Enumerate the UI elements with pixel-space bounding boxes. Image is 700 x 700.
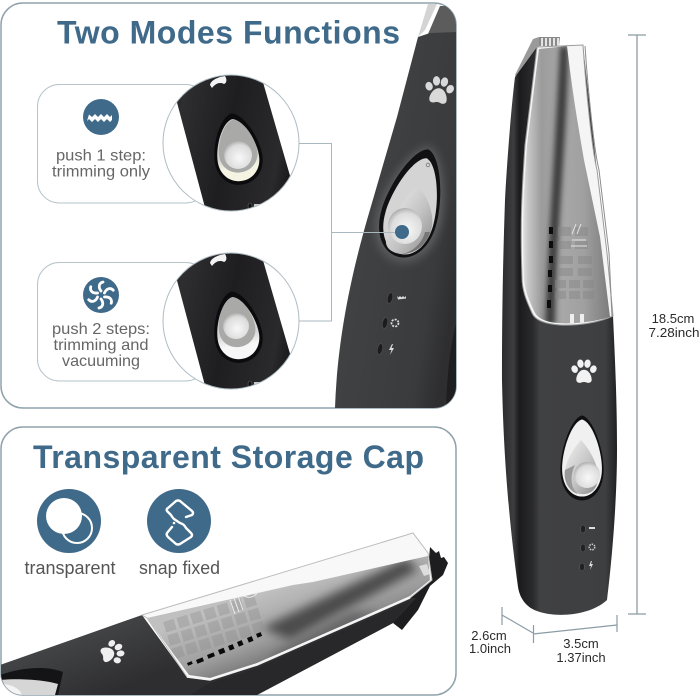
indicator lights <box>580 525 595 571</box>
transparent cap <box>142 533 432 680</box>
label: width: 3.5cm <box>563 636 599 651</box>
dark streak in cap <box>262 558 418 640</box>
dimension: height: 7.28inch <box>648 325 700 340</box>
trimmer close-up on panel edge <box>335 4 461 408</box>
transparent cap <box>521 45 613 325</box>
handle <box>502 45 617 615</box>
dimension: width <box>533 615 617 665</box>
panel background <box>1 3 456 408</box>
trimmer body <box>0 598 416 695</box>
switch button edge <box>0 668 63 695</box>
heading: two modes functions: Two Modes Functions <box>57 14 400 50</box>
blade head <box>515 37 539 79</box>
callout: push 2 steps <box>38 262 208 381</box>
callout: push 1 step <box>38 84 208 203</box>
callout: push 2 steps: trimming and <box>54 337 148 354</box>
dimension: depth <box>469 607 533 656</box>
icon: paw print <box>100 640 124 664</box>
icon: paw print <box>425 76 454 104</box>
switch button <box>373 144 446 265</box>
panel: transparent storage cap <box>0 427 456 695</box>
dimension: depth: 1.0inch <box>469 641 511 656</box>
comb blade <box>393 547 448 630</box>
icon: trimming blade <box>83 99 119 135</box>
switch button <box>560 416 604 500</box>
dimension: height <box>628 35 700 614</box>
label: push 1 step: push 1 step: <box>56 148 146 164</box>
heading: transparent storage cap: Transparent Storage Cap <box>33 439 424 475</box>
panel background <box>1 427 456 695</box>
indicator lights <box>376 292 406 355</box>
icon: paw print <box>570 359 598 383</box>
vent grid <box>555 227 590 299</box>
vent grid <box>163 593 268 660</box>
trimmer with transparent cap <box>0 533 448 695</box>
callout: push 1 step: trimming only <box>52 164 150 180</box>
label: transparent: transparent <box>24 558 116 578</box>
dimension: width: 1.37inch <box>556 650 606 665</box>
panel: two modes functions <box>1 3 461 423</box>
label: height: 18.5cm <box>652 311 694 326</box>
label: snap fixed: snap fixed <box>139 558 220 578</box>
label: depth: 2.6cm <box>471 628 507 643</box>
icon: snap fixed <box>147 489 211 553</box>
black vent slots <box>547 227 553 308</box>
indicator dot <box>395 225 409 239</box>
callout: push 2 steps: vacuuming <box>62 353 140 370</box>
icon: transparent <box>37 489 101 553</box>
dark streak in cap <box>545 46 568 325</box>
label: push 2 steps: push 2 steps: <box>52 321 150 338</box>
leader lines <box>299 144 395 321</box>
product: full trimmer <box>502 37 617 615</box>
detail circle: button position 2 <box>162 252 300 390</box>
detail circle: button position 1 <box>162 74 300 212</box>
black vent slots <box>187 632 262 666</box>
icon: vacuum fan <box>83 277 119 313</box>
